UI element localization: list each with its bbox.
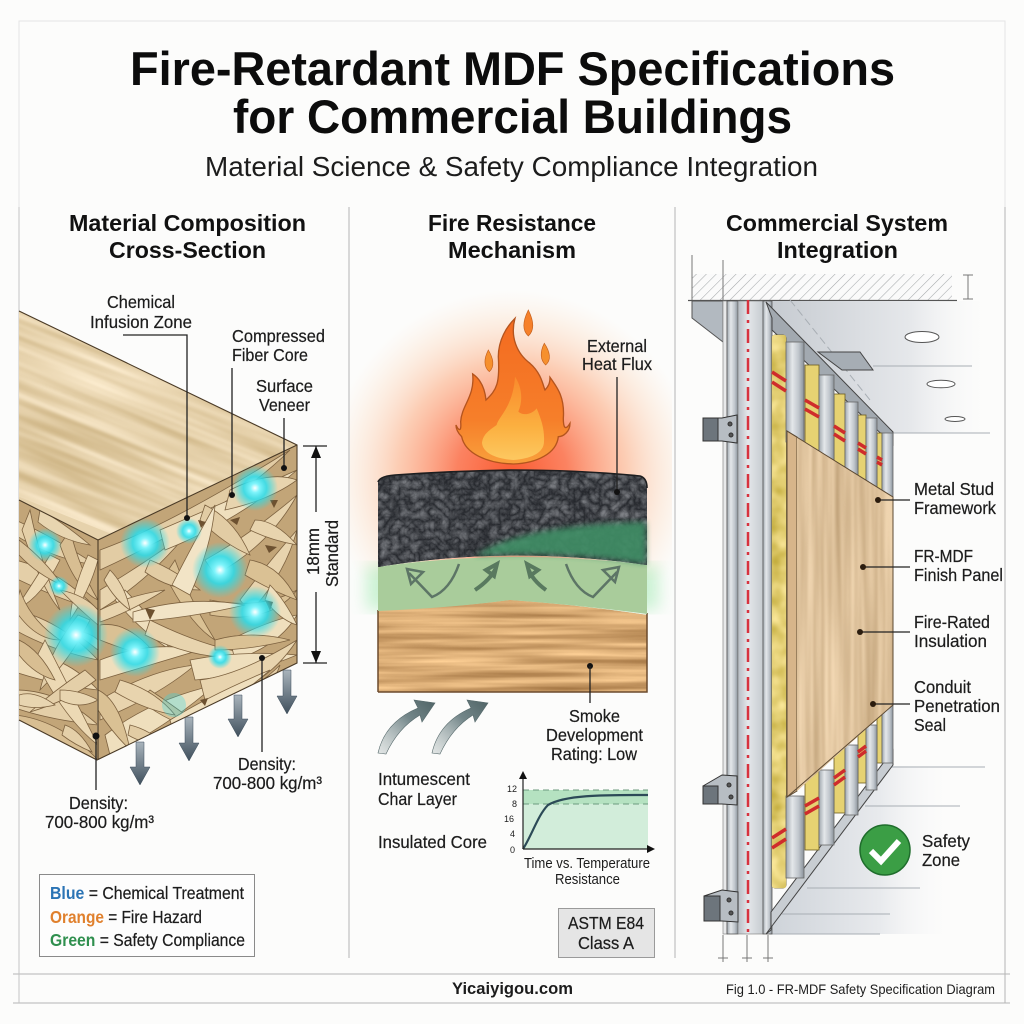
icon: flame <box>456 310 570 464</box>
heading: fire resistance mechanism: Mechanism <box>448 237 576 263</box>
heading: material composition: Cross-Section <box>109 237 266 263</box>
badge: ASTM E84 class A: Class A <box>578 933 634 953</box>
badge: ASTM E84 class A <box>558 908 654 958</box>
green glow <box>366 565 659 610</box>
floor plane <box>764 766 985 934</box>
callout: chemical infusion zone: Chemical <box>107 292 175 312</box>
callout: density left: 700-800 kg/m³ <box>45 812 154 832</box>
metal stud framework <box>723 301 893 934</box>
heading: fire resistance mechanism: Fire Resistance <box>428 210 596 236</box>
footer: figure caption: Fig 1.0 - FR-MDF Safety Specification Diagram <box>726 981 995 997</box>
ceiling and floor lines <box>770 300 990 934</box>
callout: density right <box>213 655 322 793</box>
callout: surface veneer: Veneer <box>259 395 310 415</box>
red conduit <box>772 372 882 848</box>
callout: external heat flux: External <box>587 336 647 356</box>
callout: surface veneer <box>256 376 313 471</box>
label: intumescent char layer: Char Layer <box>378 789 457 809</box>
label: intumescent char layer <box>378 769 470 809</box>
legend: Orange = Fire Hazard <box>50 907 202 927</box>
subtitle: Material Science & Safety Compliance Integration <box>205 151 818 182</box>
legend: Blue = Chemical Treatment <box>50 883 244 903</box>
airflow arrows <box>407 564 619 597</box>
MDF block top veneer <box>19 312 296 540</box>
callout: fire-rated insulation <box>857 612 990 651</box>
heading: material composition <box>69 210 306 263</box>
callout: smoke development <box>546 663 643 764</box>
callout: compressed fiber core: Compressed <box>232 326 325 346</box>
wall brackets <box>703 415 738 922</box>
callout: conduit penetration seal: Conduit <box>914 677 971 697</box>
top left bracket <box>692 301 723 342</box>
callout: density right: Density: <box>238 754 296 774</box>
line chart: time vs temperature: Time vs. Temperature <box>524 856 650 872</box>
label: intumescent char layer: Intumescent <box>378 769 470 789</box>
callout: chemical infusion zone: Infusion Zone <box>90 312 192 332</box>
panel: material composition <box>18 214 338 957</box>
callout: external heat flux <box>582 336 652 495</box>
insulation above and below <box>772 335 882 888</box>
label: safety zone <box>922 831 970 870</box>
title: Fire-Retardant MDF Specifications <box>130 42 895 95</box>
dimension: 18mm standard: Standard <box>322 520 342 587</box>
callout: surface veneer: Surface <box>256 376 313 396</box>
label: safety zone: Safety <box>922 831 970 851</box>
block edges <box>19 311 297 760</box>
callout: smoke development: Rating: Low <box>551 744 637 764</box>
callout: smoke development: Development <box>546 725 643 745</box>
line chart: time vs temperature: 0 <box>510 845 515 855</box>
callout: smoke development: Smoke <box>569 706 620 726</box>
callout: metal stud framework: Metal Stud <box>914 479 994 499</box>
icon: safety check <box>860 825 910 875</box>
title <box>130 42 895 143</box>
heading: commercial system integration: Integration <box>777 237 898 263</box>
callout: density right: 700-800 kg/m³ <box>213 773 322 793</box>
FR-MDF finish panel <box>787 431 893 797</box>
label: safety zone: Zone <box>922 850 960 870</box>
callout: compressed fiber core: Fiber Core <box>232 345 308 365</box>
line chart: time vs temperature: 12 <box>507 784 517 794</box>
title: for Commercial Buildings <box>233 90 792 143</box>
line chart: time vs temperature: 16 <box>504 814 514 824</box>
callout: compressed fiber core <box>229 326 325 498</box>
callout: conduit penetration seal: Penetration <box>914 696 1000 716</box>
callout: external heat flux: Heat Flux <box>582 354 652 374</box>
downward arrows <box>130 670 297 785</box>
callout: finish panel: FR-MDF <box>914 546 973 566</box>
heading: material composition: Material Composition <box>69 210 306 236</box>
panel: commercial system <box>688 210 1003 962</box>
heading: fire resistance mechanism <box>428 210 596 263</box>
dimension: 18mm standard <box>303 446 342 663</box>
panel: fire resistance <box>350 210 672 958</box>
legend: Green = Safety Compliance <box>50 930 245 950</box>
red dashed centre line <box>747 300 749 934</box>
line chart: time vs temperature: 8 <box>512 799 517 809</box>
ceiling slab hatch <box>688 274 957 300</box>
callout: fire-rated insulation: Insulation <box>914 631 987 651</box>
wood base layer <box>378 600 647 692</box>
callout: conduit penetration seal: Seal <box>914 715 946 735</box>
ceiling plane <box>765 301 990 433</box>
heading: commercial system integration <box>726 210 948 263</box>
callout: metal stud framework: Framework <box>914 498 996 518</box>
intumescent char layer <box>378 470 647 567</box>
callout: density left: Density: <box>69 793 128 813</box>
line chart: time vs temperature <box>504 771 655 888</box>
chemical treatment glows <box>28 465 281 717</box>
callout: finish panel <box>860 546 1003 585</box>
duct bracket <box>818 352 873 370</box>
callout: chemical infusion zone <box>90 292 192 521</box>
MDF block front face with fibers <box>95 440 300 765</box>
studs <box>786 342 893 878</box>
callout: density left <box>45 732 154 832</box>
curved arrows <box>378 700 488 754</box>
dimension: 18mm standard: 18mm <box>303 528 323 575</box>
line chart: time vs temperature: 4 <box>510 829 515 839</box>
callout: fire-rated insulation: Fire-Rated <box>914 612 990 632</box>
footer: website: Yicaiyigou.com <box>452 979 573 998</box>
heading: commercial system integration: Commercial System <box>726 210 948 236</box>
green treated layer <box>378 557 647 614</box>
callout: metal stud framework <box>875 479 996 518</box>
callout: finish panel: Finish Panel <box>914 565 1003 585</box>
heat glow <box>350 290 672 580</box>
badge: ASTM E84 class A: ASTM E84 <box>568 913 644 933</box>
legend <box>40 874 254 956</box>
line chart: time vs temperature: Resistance <box>555 872 620 888</box>
MDF block side face with fibers <box>19 500 98 760</box>
ceiling lights <box>905 332 965 422</box>
dimension ticks <box>692 255 973 962</box>
callout: conduit penetration seal <box>870 677 1000 735</box>
label: insulated core: Insulated Core <box>378 832 487 852</box>
